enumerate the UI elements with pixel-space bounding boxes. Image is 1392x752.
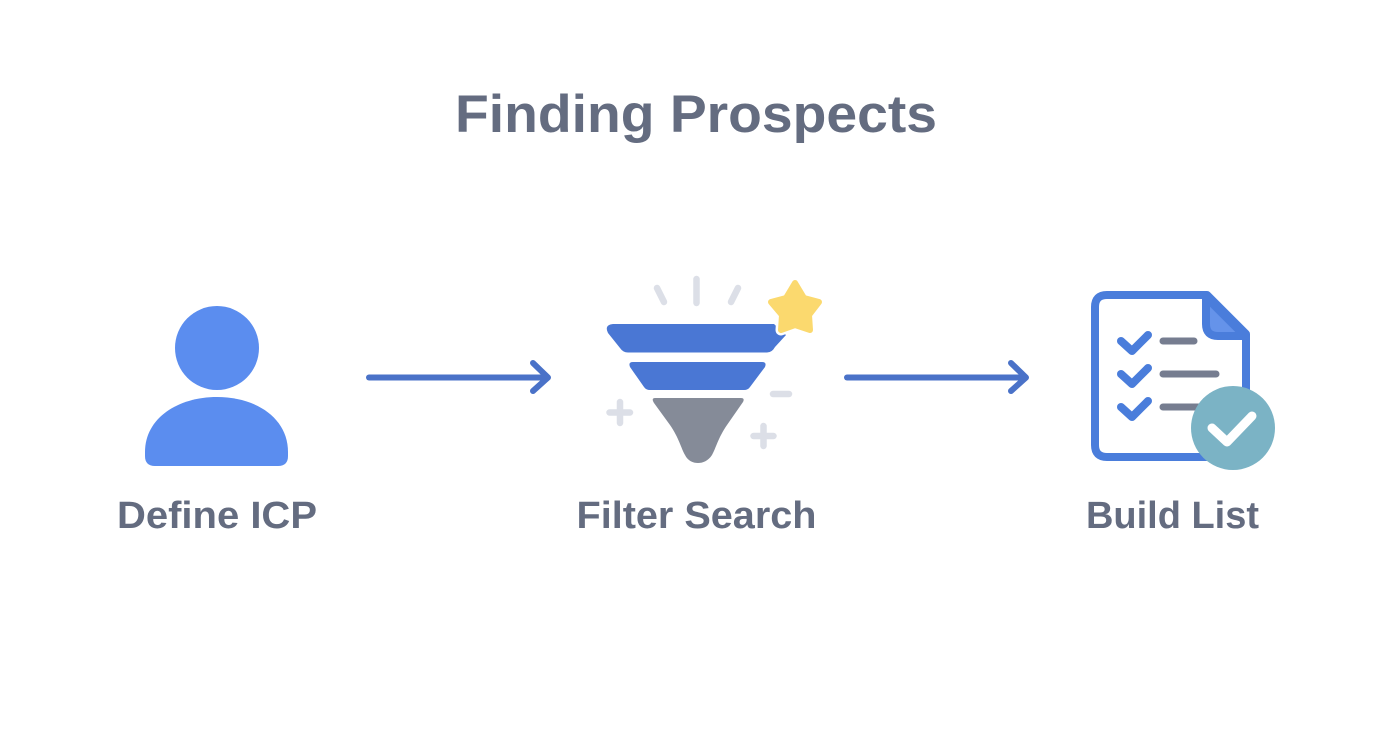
list lines [1163,341,1216,407]
funnel top band [607,324,786,352]
title: Finding Prospects [455,85,937,144]
checkmarks [1121,335,1148,417]
label: Filter Search: Filter Search [576,495,816,537]
icon: filter funnel [607,279,819,463]
document sheet [1095,295,1246,457]
star [771,283,819,330]
funnel middle band [629,362,766,390]
folded corner [1206,297,1245,336]
icon: person [145,306,288,466]
label: Build List: Build List [1086,495,1259,537]
label: Define ICP: Define ICP [117,495,317,537]
sparkle lines [610,279,789,446]
badge check [1212,416,1252,442]
funnel bottom spout [653,398,744,463]
badge [1191,386,1275,470]
arrow: second [847,363,1026,391]
icon: checklist document [1095,295,1275,470]
arrow: first [369,363,548,391]
